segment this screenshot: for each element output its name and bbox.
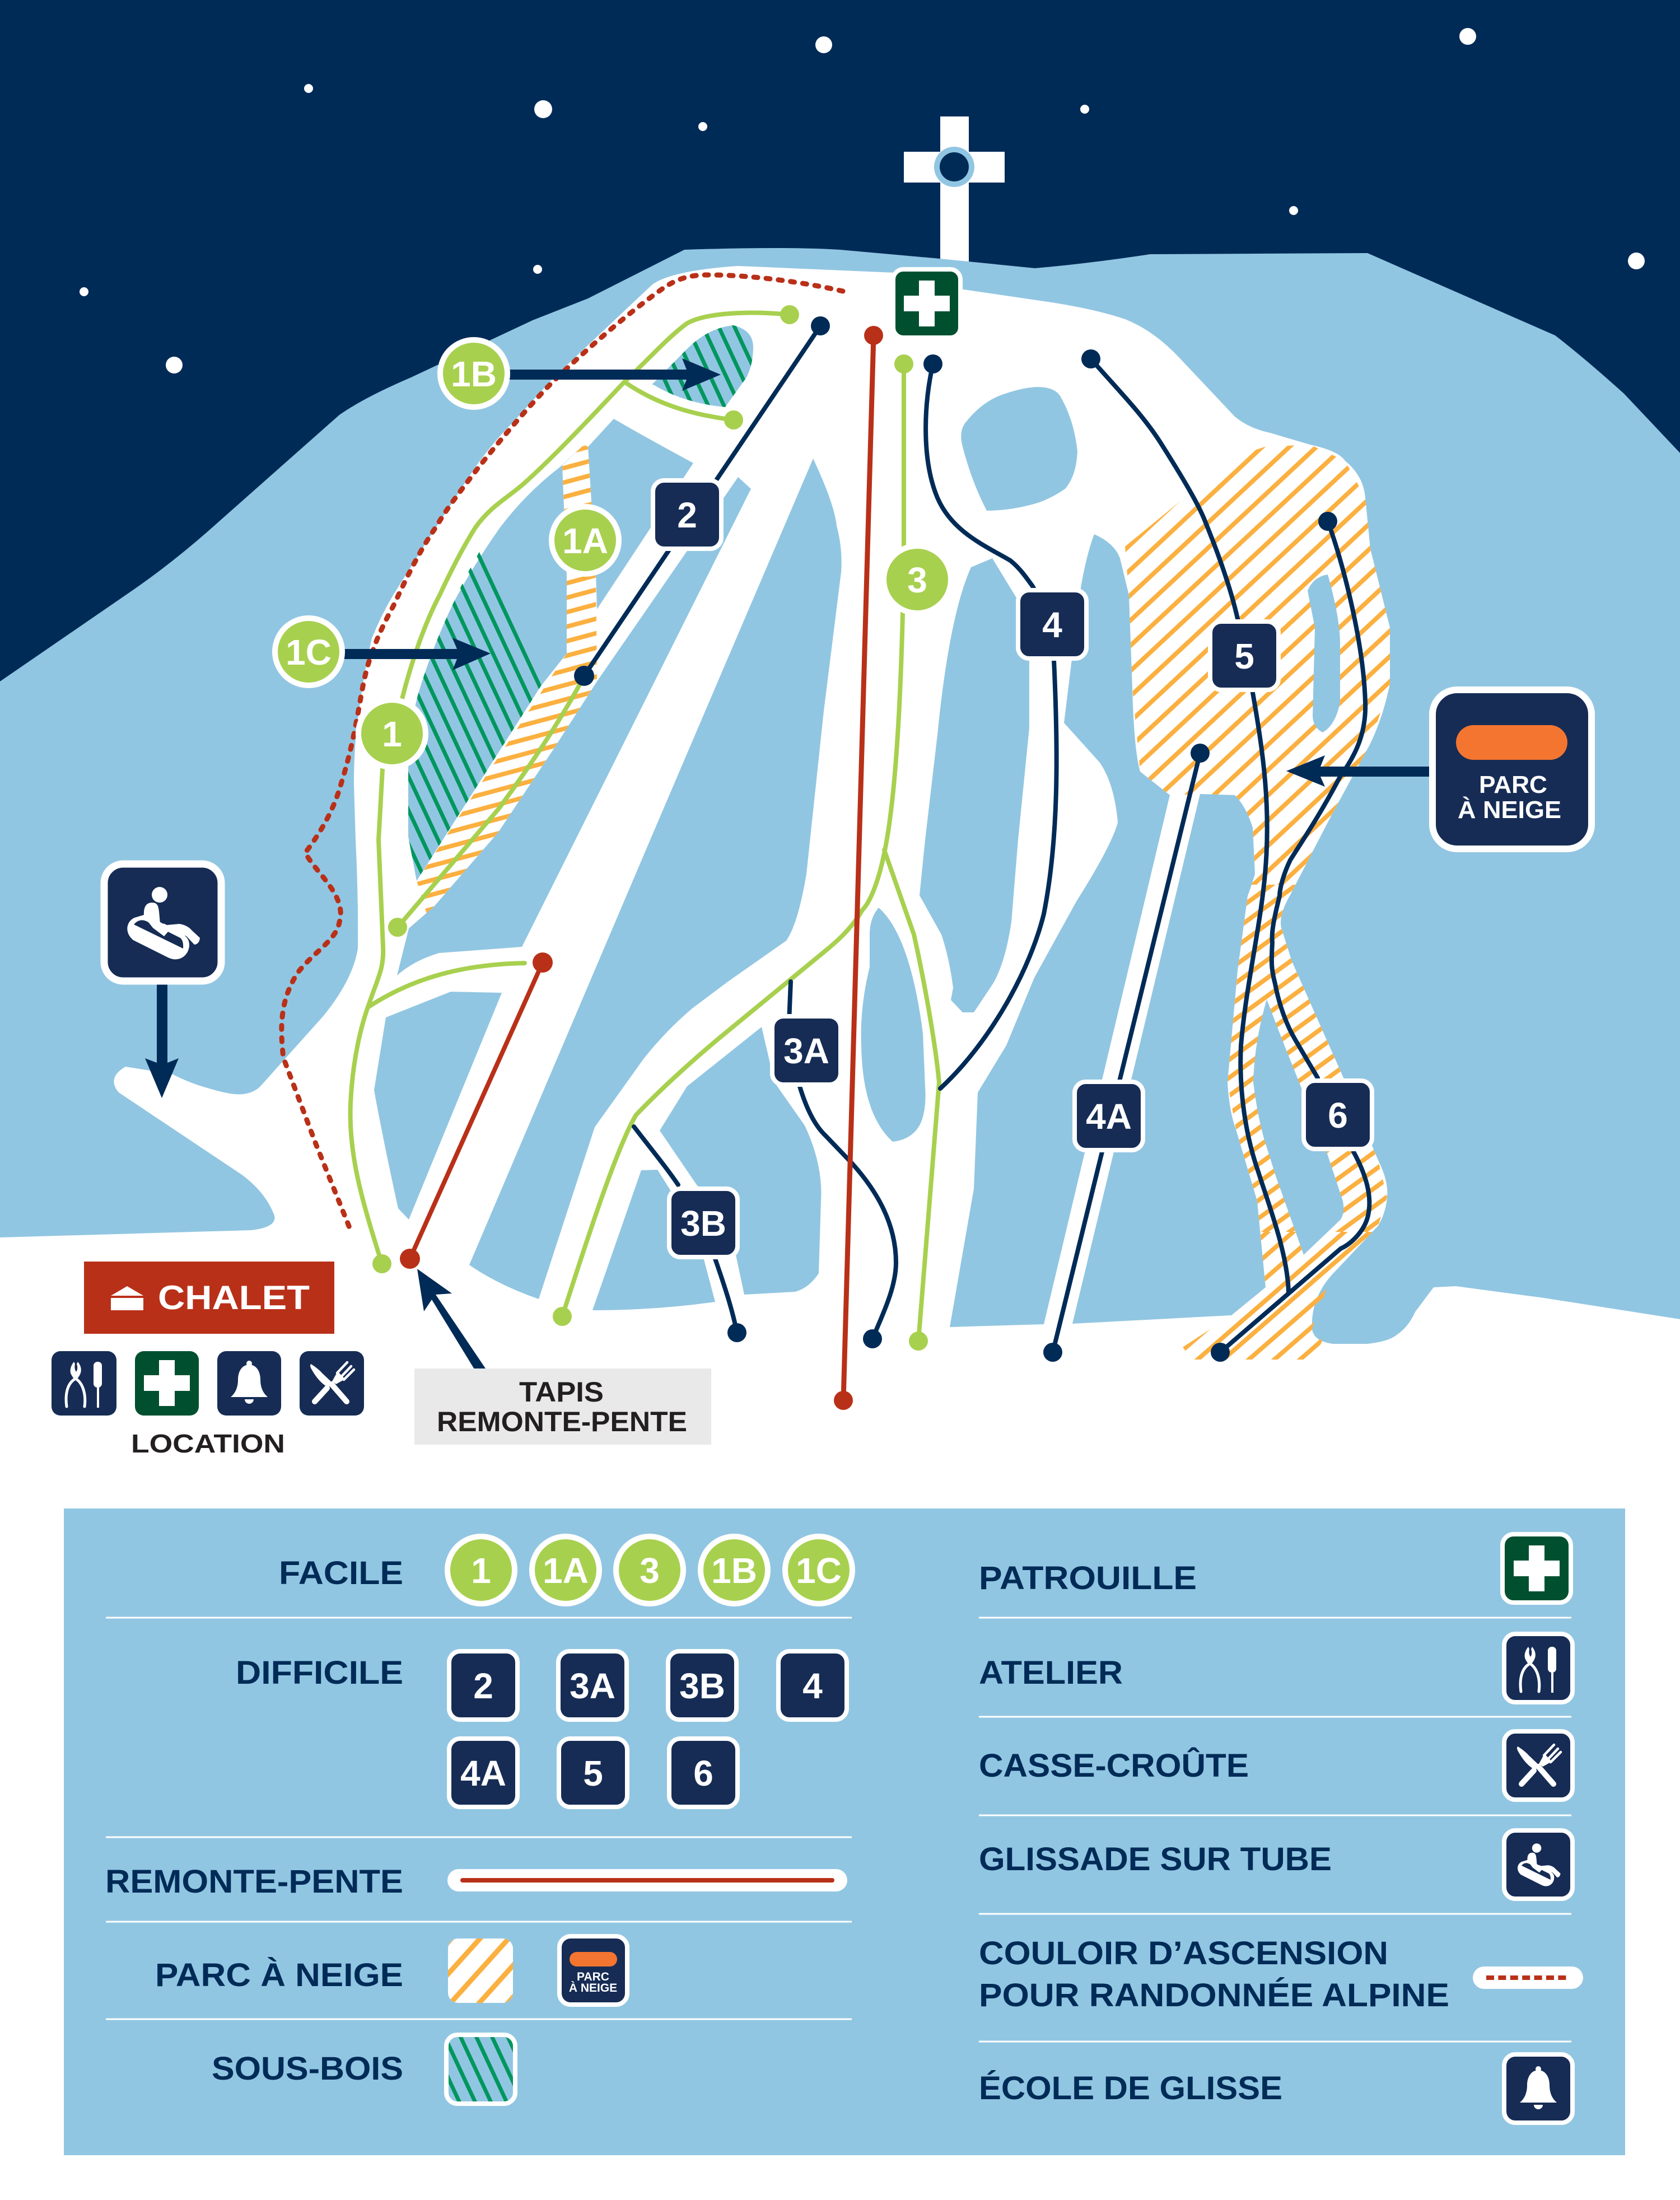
legend: couloir d'ascension: POUR RANDONNÉE ALPINE [979, 1977, 1449, 2014]
callout: parc à neige [1432, 690, 1592, 849]
legend: facile [279, 1536, 852, 1604]
arrow: tube park [145, 980, 179, 1098]
legend: facile: 1 [471, 1550, 491, 1591]
legend: patrouille: PATROUILLE [979, 1560, 1197, 1596]
legend: glissade sur tube [979, 1830, 1572, 1899]
arrow: 1B [474, 358, 721, 391]
legend: difficile: DIFFICILE [236, 1655, 403, 1691]
legend: facile: 1C [796, 1550, 842, 1591]
legend: casse-croûte: CASSE-CROÛTE [979, 1748, 1249, 1784]
arrow: 1C [309, 638, 491, 670]
forest glade hatch [408, 552, 541, 875]
badge: 4 [1018, 590, 1086, 658]
badge: 3B [669, 1189, 738, 1257]
legend: difficile: 3B [679, 1666, 725, 1706]
legend: parc à neige [155, 1936, 627, 2005]
chalet sign [84, 1262, 334, 1334]
legend: école de glisse [979, 2054, 1572, 2123]
legend: parc à neige: À NEIGE [569, 1982, 617, 1995]
uphill ski route dashed [282, 275, 843, 1230]
legend: couloir d'ascension: COULOIR D’ASCENSION [979, 1935, 1388, 1972]
legend: facile: 1A [543, 1550, 589, 1591]
badge: 3 [884, 546, 951, 613]
legend: difficile: 3A [570, 1666, 615, 1706]
easy run lines [351, 313, 939, 1341]
badge: 3A [772, 1016, 841, 1085]
badge: 6: 6 [1328, 1095, 1348, 1136]
badge: 5: 5 [1234, 636, 1254, 676]
snow park hatch [1120, 437, 1400, 1366]
legend: glissade sur tube: GLISSADE SUR TUBE [979, 1841, 1332, 1877]
legend: facile: FACILE [279, 1555, 403, 1591]
arrow: parc à neige [1286, 755, 1434, 787]
stars [80, 28, 1645, 373]
legend: difficile: 5 [583, 1753, 603, 1793]
legend: atelier: ATELIER [979, 1655, 1123, 1691]
difficult run lines [584, 326, 1369, 1352]
forest islands [374, 387, 1343, 1327]
badge: 6 [1304, 1081, 1372, 1149]
chalet sign: CHALET [158, 1279, 310, 1316]
legend: parc à neige: PARC [577, 1970, 609, 1983]
legend: atelier [979, 1634, 1572, 1702]
chairlift and carpet lift lines [400, 326, 883, 1410]
glade 1B island [652, 325, 753, 407]
legend: difficile: 2 [473, 1666, 493, 1706]
badge: 5 [1210, 622, 1278, 690]
legend: difficile: 4 [802, 1666, 823, 1706]
arrow: carpet lift [417, 1269, 486, 1372]
panel: legend [64, 1508, 1625, 2155]
legend: difficile [236, 1651, 847, 1807]
badge: 4A [1075, 1082, 1143, 1150]
carpet lift label: REMONTE-PENTE [437, 1406, 687, 1437]
difficult run end dots [574, 316, 1337, 1362]
legend: patrouille [979, 1534, 1571, 1603]
callout: tube park icon [104, 864, 221, 981]
summit cross [904, 116, 1005, 263]
location label: LOCATION [131, 1429, 285, 1458]
sky background [0, 0, 1680, 1344]
legend: facile: 1B [711, 1550, 757, 1591]
badge: 1A: 1A [562, 521, 608, 561]
chalet service icons [52, 1351, 364, 1416]
legend: école de glisse: ÉCOLE DE GLISSE [979, 2070, 1282, 2106]
badge: 1 [358, 700, 426, 767]
legend: remonte-pente [105, 1863, 847, 1900]
legend: sous-bois [212, 2035, 515, 2104]
legend: parc à neige: PARC À NEIGE [155, 1957, 403, 1993]
badge: 1: 1 [382, 714, 402, 754]
legend: difficile: 4A [460, 1753, 506, 1793]
badge: 1B: 1B [451, 354, 497, 394]
badge: 3B: 3B [680, 1203, 726, 1244]
callout: parc à neige: PARC [1479, 771, 1547, 798]
legend: sous-bois: SOUS-BOIS [212, 2050, 403, 2087]
badge: 4: 4 [1042, 605, 1062, 645]
badge: 1C [275, 618, 342, 685]
mountain [0, 248, 1680, 1344]
badge: 1B [440, 340, 507, 407]
badge: 1A [552, 507, 619, 574]
legend: couloir d'ascension [979, 1935, 1583, 2014]
carpet lift label [414, 1368, 711, 1445]
icon: ski patrol on map [893, 269, 960, 338]
badge: 2: 2 [677, 495, 697, 535]
badge: 3A: 3A [783, 1031, 829, 1071]
badge: 3: 3 [907, 560, 927, 600]
carpet lift label: TAPIS [519, 1376, 604, 1408]
legend: casse-croûte [979, 1731, 1572, 1800]
badge: 2 [653, 480, 721, 549]
easy run end dots [372, 305, 928, 1351]
legend: facile: 3 [640, 1550, 660, 1591]
run 1A hatch [417, 446, 597, 913]
callout: parc à neige: À NEIGE [1458, 796, 1561, 824]
legend: remonte-pente: REMONTE-PENTE [105, 1863, 403, 1900]
badge: 4A: 4A [1086, 1096, 1132, 1137]
badge: 1C: 1C [286, 632, 332, 672]
legend: difficile: 6 [693, 1753, 713, 1793]
